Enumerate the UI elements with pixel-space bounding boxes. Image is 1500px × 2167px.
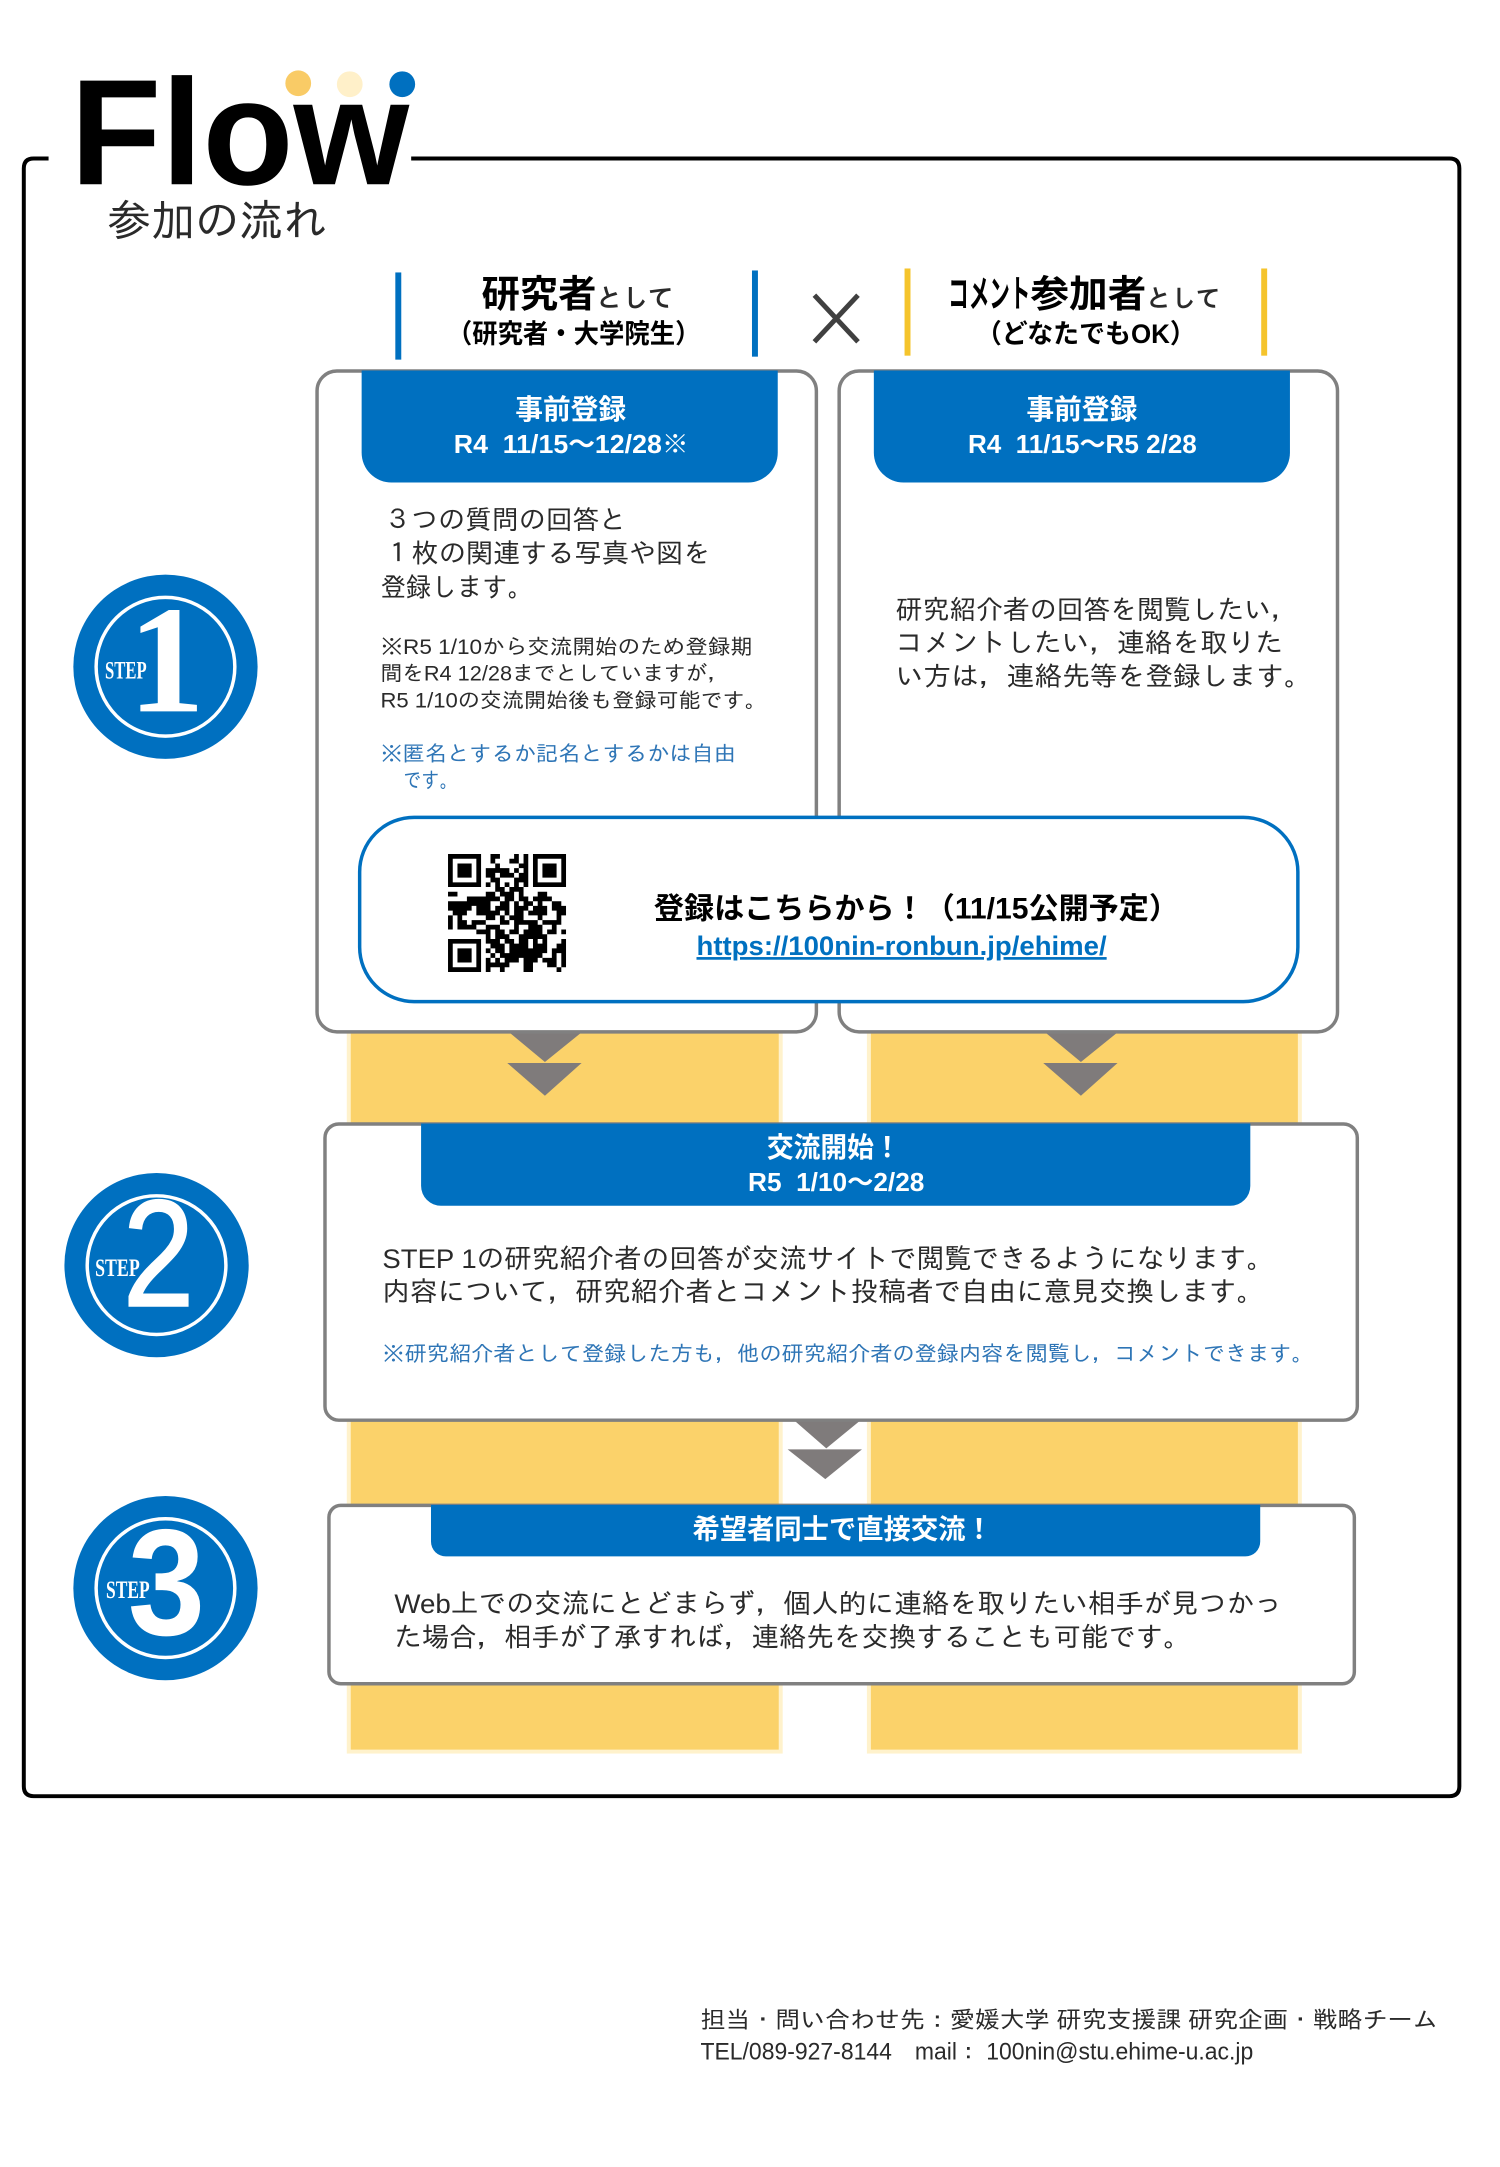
arrow: step 2 to 3	[788, 1415, 862, 1479]
title: Flow: Flow	[70, 48, 410, 216]
tab heading: 事前登録	[1026, 394, 1138, 425]
blue note: ※匿名とするか記名とするかは自由	[380, 742, 736, 766]
yellow column right	[869, 1020, 1300, 1752]
arrow: left step 1 to 2	[507, 1026, 582, 1096]
description: コメントしたい，連絡を取りた	[896, 628, 1283, 658]
column header: commenter: コメント	[948, 273, 1030, 315]
registration link: https://100nin-ronbun.jp/ehime/	[697, 931, 1107, 961]
icon: step 2 badge: 2	[123, 1170, 194, 1339]
registration prompt: 登録はこちらから！（11/15公開予定）	[654, 892, 1179, 925]
description: Web上での交流にとどまらず，個人的に連絡を取りたい相手が見つかっ	[394, 1588, 1282, 1619]
blue note: ※研究紹介者として登録した方も，他の研究紹介者の登録内容を閲覧し，コメントできます。	[382, 1342, 1314, 1366]
yellow column left	[349, 1020, 781, 1752]
icon: QR code	[448, 854, 566, 972]
footer contact: 担当・問い合わせ先：愛媛大学 研究支援課 研究企画・戦略チーム	[700, 2007, 1438, 2034]
description: 研究紹介者の回答を閲覧したい，	[896, 595, 1298, 625]
arrow: right step 1 to 2	[1043, 1026, 1118, 1096]
tab date: R4 11/15〜R5 2/28	[968, 431, 1197, 459]
description: STEP 1の研究紹介者の回答が交流サイトで閲覧できるようになります。	[382, 1243, 1274, 1274]
column header: researcher: （研究者・大学院生）	[447, 319, 700, 349]
icon: pale dot	[337, 71, 363, 97]
tab: direct exchange	[431, 1505, 1260, 1556]
description	[382, 1243, 1274, 1307]
column header: researcher: 研究者	[482, 273, 596, 315]
column header: commenter: （どなたでもOK）	[976, 319, 1196, 349]
note: ※R5 1/10から交流開始のため登録期	[380, 636, 753, 659]
icon: step 3 badge: STEP	[106, 1575, 150, 1604]
description: 登録します。	[380, 572, 533, 602]
tab: exchange start	[421, 1123, 1250, 1206]
icon: step 1 badge: STEP	[105, 656, 147, 685]
column header: researcher: として	[596, 285, 674, 313]
icon: step 3 badge	[73, 1496, 258, 1680]
description: ３つの質問の回答と	[384, 505, 626, 535]
tab heading: 希望者同士で直接交流！	[693, 1514, 993, 1545]
icon: step 2 badge	[64, 1170, 249, 1357]
panel: step 1 researcher	[317, 371, 816, 1032]
panel: step 2	[325, 1123, 1357, 1420]
icon: step 1 badge: 1	[128, 575, 205, 745]
blue note	[380, 742, 736, 793]
blue note: です。	[403, 769, 458, 793]
column header: commenter: 参加者	[1030, 273, 1146, 315]
description	[896, 595, 1312, 692]
column header: researcher	[395, 270, 758, 360]
panel: step 3	[329, 1505, 1354, 1684]
icon: blue dot	[389, 71, 415, 97]
tab: commenter registration	[874, 371, 1290, 482]
tab date: R5 1/10〜2/28	[748, 1169, 924, 1197]
description: た場合，相手が了承すれば，連絡先を交換することも可能です。	[394, 1622, 1191, 1653]
description	[394, 1588, 1282, 1653]
footer contact: TEL/089-927-8144 mail： 100nin@stu.ehime-u.ac.jp	[700, 2039, 1253, 2066]
column header: commenter: として	[1146, 286, 1221, 313]
description: い方は，連絡先等を登録します。	[896, 662, 1312, 692]
tab: researcher registration	[362, 371, 778, 482]
footer contact	[700, 2007, 1438, 2066]
tab date: R4 11/15〜12/28※	[454, 431, 689, 459]
note	[380, 636, 767, 712]
icon: yellow dot	[285, 70, 311, 96]
subtitle: 参加の流れ	[107, 198, 327, 246]
callout: registration QR	[360, 817, 1298, 1002]
outer frame	[24, 159, 1459, 1796]
icon: cross	[814, 295, 858, 342]
description	[380, 505, 710, 602]
icon: step 1 badge	[73, 575, 258, 759]
tab heading: 事前登録	[515, 394, 626, 425]
note: R5 1/10の交流開始後も登録可能です。	[380, 689, 767, 712]
icon: step 3 badge: 3	[128, 1499, 205, 1668]
description: 内容について，研究紹介者とコメント投稿者で自由に意見交換します。	[382, 1276, 1264, 1307]
note: 間をR4 12/28までとしていますが，	[380, 663, 729, 686]
icon: step 2 badge: STEP	[95, 1253, 140, 1282]
panel: step 1 commenter	[839, 371, 1337, 1032]
description: １枚の関連する写真や図を	[384, 539, 710, 569]
tab heading: 交流開始！	[767, 1132, 901, 1163]
column header: commenter	[905, 268, 1267, 356]
